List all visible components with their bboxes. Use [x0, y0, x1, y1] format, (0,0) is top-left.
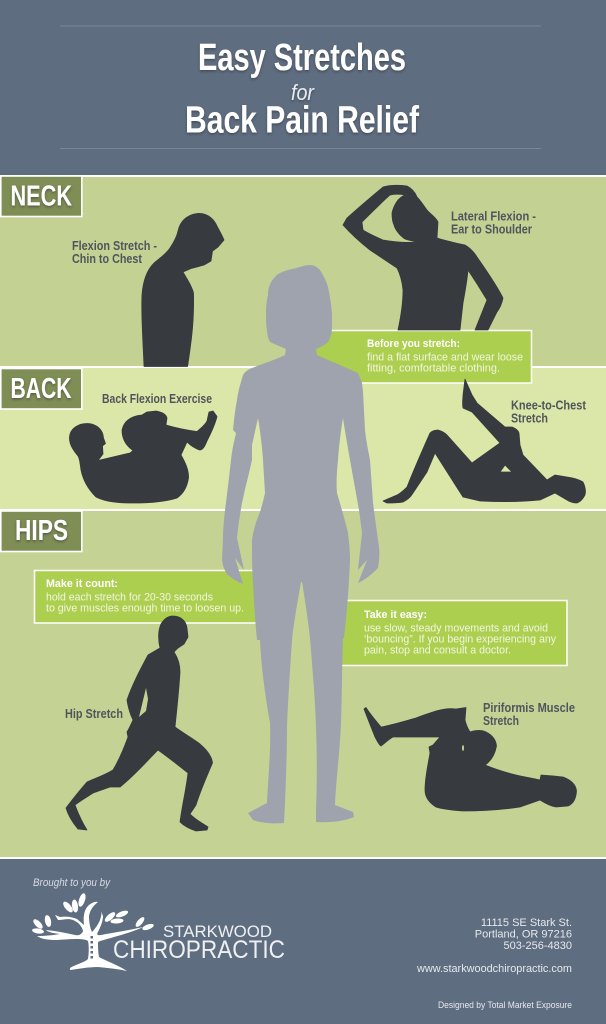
label: lateral flexion: Lateral Flexion -	[451, 208, 536, 224]
label: lateral flexion	[451, 208, 536, 236]
text: address	[475, 917, 572, 952]
badge: hips: HIPS	[15, 515, 68, 547]
badge: hips	[1, 511, 82, 552]
panel: hips	[0, 509, 606, 859]
text: logo wordmark	[113, 923, 285, 964]
title	[185, 37, 419, 142]
label: flexion stretch: Chin to Chest	[72, 251, 143, 266]
badge: neck	[1, 176, 82, 216]
label: piriformis	[483, 700, 575, 728]
callout: take it easy: use slow, steady movements and avoid	[364, 622, 548, 634]
label: piriformis: Stretch	[483, 713, 519, 728]
figure: lateral flexion	[343, 185, 503, 330]
text: brought to you by: Brought to you by	[33, 877, 111, 889]
badge: neck: NECK	[10, 180, 72, 212]
figure: flexion stretch	[142, 213, 224, 366]
text: address: 503-256-4830	[503, 940, 572, 952]
callout: make it count: to give muscles enough time to loosen up.	[46, 602, 244, 614]
title: Easy Stretches	[198, 37, 406, 79]
panel: header	[0, 0, 606, 175]
panel: neck	[0, 175, 606, 367]
text: website: www.starkwoodchiropractic.com	[416, 963, 572, 975]
callout: before you stretch: fitting, comfortable clothing.	[367, 362, 500, 374]
text: logo wordmark: STARKWOOD	[163, 923, 272, 941]
label: knee to chest: Stretch	[511, 410, 548, 426]
callout: before you stretch: find a flat surface and wear loose	[367, 352, 523, 364]
figure: piriformis stretch	[364, 708, 576, 811]
label: lateral flexion: Ear to Shoulder	[451, 222, 532, 236]
text: logo wordmark: CHIROPRACTIC	[113, 936, 285, 964]
callout: take it easy: Take it easy:	[364, 609, 427, 621]
icon: tree logo	[32, 892, 154, 971]
callout: take it easy: ‘bouncing”. If you begin experiencing any	[364, 634, 556, 646]
figure: central standing woman	[222, 265, 379, 823]
label: knee to chest	[511, 398, 587, 426]
label: knee to chest: Knee-to-Chest	[511, 398, 587, 412]
panel: back	[0, 366, 606, 509]
label: hip stretch: Hip Stretch	[65, 706, 123, 721]
title: Back Pain Relief	[185, 100, 419, 142]
figure: knee to chest stretch	[383, 379, 585, 503]
callout: before you stretch: Before you stretch:	[367, 338, 460, 350]
label: flexion stretch	[72, 238, 157, 266]
badge: back: BACK	[10, 373, 72, 405]
figure: hip stretch	[66, 616, 212, 831]
callout: take it easy: pain, stop and consult a doctor.	[364, 644, 511, 656]
figure: back flexion exercise	[69, 411, 217, 503]
panel: footer	[0, 859, 606, 1024]
callout: make it count: Make it count:	[46, 578, 118, 590]
label: back flexion exercise: Back Flexion Exercise	[102, 391, 212, 406]
label: piriformis: Piriformis Muscle	[483, 700, 575, 715]
callout: before you stretch	[290, 330, 532, 383]
callout: make it count: hold each stretch for 20-30 seconds	[46, 592, 213, 604]
callout: make it count	[34, 570, 264, 623]
text: address: Portland, OR 97216	[475, 928, 572, 940]
badge: back	[1, 368, 82, 409]
text: address: 11115 SE Stark St.	[481, 917, 572, 929]
text: designer credit: Designed by Total Market Exposure	[438, 1000, 572, 1010]
title: for	[291, 80, 315, 105]
label: flexion stretch: Flexion Stretch -	[72, 238, 157, 253]
callout: take it easy	[330, 600, 567, 666]
